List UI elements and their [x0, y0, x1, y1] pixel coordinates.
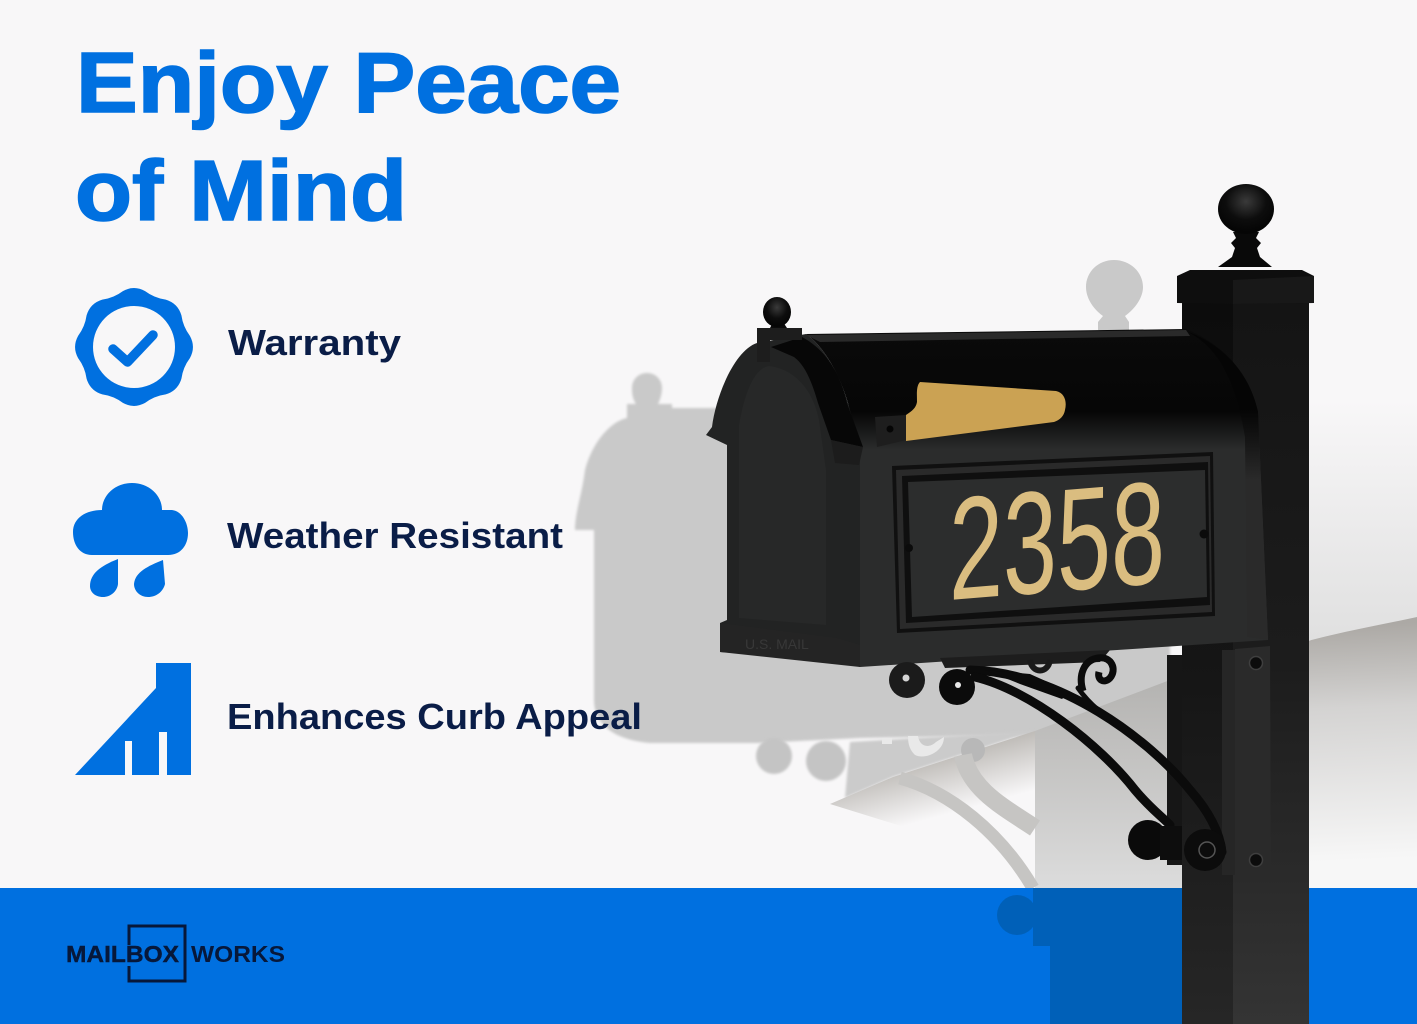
lower knob [1128, 820, 1168, 860]
label: warranty: Warranty [228, 322, 401, 363]
address plaque outer frame [892, 452, 1215, 633]
small back scrolls [1030, 660, 1050, 670]
lid hinge tab [757, 328, 802, 362]
dome top trim [806, 330, 1190, 342]
box base plinth [720, 623, 860, 667]
bracket [889, 646, 1271, 878]
dome front band [771, 337, 863, 447]
icon: warranty badge [75, 288, 193, 406]
post shaft front face [1233, 300, 1309, 1024]
title: of Mind [75, 144, 407, 239]
post inner shade strip [1222, 650, 1235, 875]
label: enhances curb appeal: Enhances Curb Appeal [227, 696, 642, 737]
shadow: mailbox scrolls [756, 738, 846, 781]
shadow: post on floor [1035, 680, 1182, 888]
post finial ball [1218, 184, 1274, 234]
footer band [0, 888, 1417, 1024]
shadow: small scroll [961, 738, 985, 762]
floor: left section below curve [830, 731, 1035, 835]
address plaque inner field [908, 470, 1207, 617]
scroll hole [902, 674, 910, 682]
post with finial [1167, 184, 1314, 1024]
right rim [1186, 331, 1268, 640]
upper right scroll [1081, 658, 1113, 691]
address plaque mid frame [896, 456, 1212, 629]
shadow: mailbox silhouette [575, 373, 1170, 743]
plaque notches [905, 530, 1208, 552]
post back strip behind bracket [1167, 655, 1182, 865]
post finial [1218, 232, 1272, 267]
shadow: big finial on wall [1086, 260, 1143, 335]
label: weather resistant: Weather Resistant [227, 515, 563, 556]
shadow: post and knob on footer band [997, 888, 1182, 1024]
bracket arms [970, 670, 1222, 852]
mailbox [706, 297, 1268, 667]
logo: mailbox works: WORKS [191, 941, 285, 967]
main body and dome [806, 329, 1268, 667]
title: Enjoy Peace [76, 36, 621, 131]
logo: mailbox works: MAILBOX [66, 941, 180, 967]
post shaft left face [1182, 300, 1233, 1024]
mount plate [1235, 646, 1271, 878]
shadow: area between box and floor curve [845, 731, 1035, 798]
flag screw [886, 426, 894, 432]
base embossed lettering: U.S. MAIL [745, 636, 809, 652]
door inner panel [739, 366, 826, 625]
under-box strip [940, 650, 1110, 668]
left bracket scroll [939, 669, 975, 705]
address plaque inner line [902, 462, 1210, 623]
background: wall gradient behind post [1300, 400, 1417, 640]
logo: mailbox works [66, 926, 285, 981]
lower scroll detail [1199, 842, 1215, 858]
icon: rain cloud [73, 483, 188, 597]
post cap front face [1233, 276, 1314, 304]
door corner block [831, 440, 863, 465]
bracket scroll highlight [955, 682, 961, 688]
title [75, 36, 621, 239]
floor: right section below curve [1300, 617, 1417, 888]
small finial [770, 322, 787, 328]
post cap [1177, 270, 1314, 304]
small finial ball [763, 297, 791, 327]
lower scroll [1184, 829, 1226, 871]
shadow: light notches under box [882, 736, 944, 756]
flag base [875, 415, 906, 447]
left scroll with hole [889, 662, 925, 698]
shadow: bracket arcs on floor [900, 755, 1035, 888]
plate bolts [1250, 656, 1262, 866]
house number: 2358 [949, 452, 1165, 632]
door outer arch [706, 334, 863, 667]
lower mount tab [1160, 826, 1182, 860]
icon: curb appeal house [75, 663, 191, 775]
arm junction wedge [985, 670, 1070, 699]
gold flag [906, 382, 1066, 441]
